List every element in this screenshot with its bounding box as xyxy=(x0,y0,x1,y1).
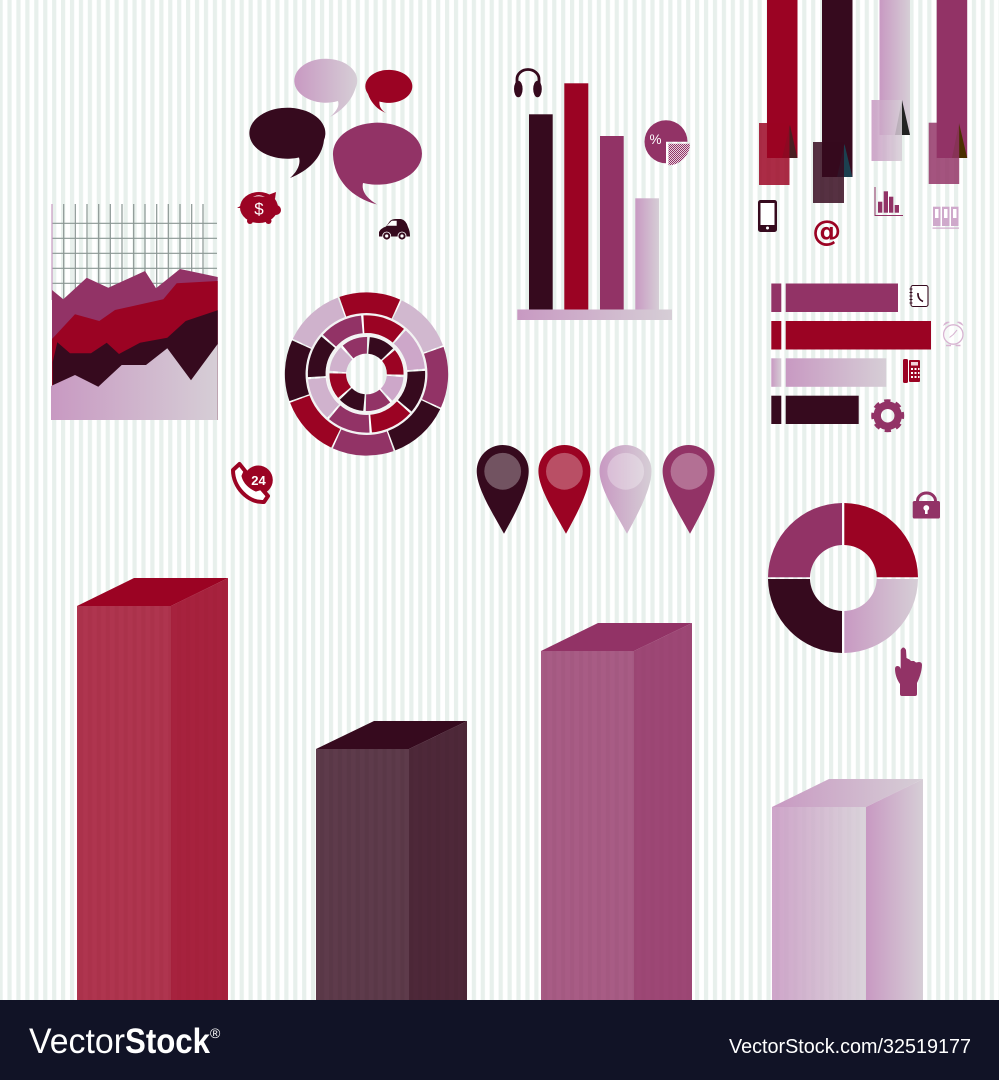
3D column: red xyxy=(77,578,228,1000)
row: light xyxy=(771,358,886,387)
area: dark xyxy=(53,310,218,420)
area: magenta xyxy=(52,269,218,420)
row: magenta xyxy=(771,284,898,312)
icon: gear xyxy=(871,399,905,433)
inner ring xyxy=(326,334,407,414)
bar: magenta xyxy=(600,136,624,310)
pin: light xyxy=(600,445,652,534)
pin: dark xyxy=(477,445,529,534)
ribbon: light xyxy=(872,0,910,161)
ribbon: magenta xyxy=(929,0,967,184)
bar: red xyxy=(564,83,588,310)
concentric ring chart xyxy=(271,279,462,469)
bubble: red xyxy=(365,70,412,113)
grid xyxy=(52,204,217,300)
pin: magenta xyxy=(663,445,715,534)
pin: red xyxy=(538,445,590,534)
area chart xyxy=(51,204,218,420)
segment: light xyxy=(844,579,918,653)
ribbon: dark xyxy=(813,0,852,203)
row: dark xyxy=(771,396,859,424)
icon: headphones xyxy=(514,70,542,97)
3D column: light xyxy=(772,779,923,1000)
outer ring xyxy=(271,279,462,469)
icon: percent pie: % xyxy=(649,132,662,147)
speech bubbles xyxy=(249,59,422,204)
bubble: magenta xyxy=(333,123,422,204)
3D column: dark xyxy=(316,721,467,1000)
footer band xyxy=(0,1000,999,1080)
icon: 24 hour phone: 24 xyxy=(251,473,266,488)
bar chart xyxy=(517,83,672,320)
icon: car xyxy=(379,219,410,240)
icon: binders xyxy=(932,207,959,229)
area: red xyxy=(52,281,218,420)
icon: percent pie xyxy=(644,120,690,165)
icon: address book xyxy=(910,286,928,306)
row: red xyxy=(771,321,931,350)
icon: piggy bank xyxy=(237,192,281,224)
horizontal bars xyxy=(771,284,931,424)
chart base xyxy=(517,310,672,320)
segment: red xyxy=(844,503,918,577)
bubble: light xyxy=(294,59,357,117)
icon: desk telephone xyxy=(903,359,920,383)
donut chart xyxy=(768,503,918,653)
icon: 24 hour phone xyxy=(233,464,273,502)
footer logo: VectorStock xyxy=(29,1022,220,1061)
area: light xyxy=(51,344,218,420)
footer url: VectorStock.com/32519177 xyxy=(729,1035,971,1058)
icon: padlock xyxy=(913,493,940,518)
icon: piggy bank: $ xyxy=(254,200,264,218)
icon: alarm clock xyxy=(943,322,964,346)
icon: small bar chart xyxy=(875,187,903,216)
ribbon: red xyxy=(759,0,798,185)
icon: at sign: @ xyxy=(812,214,841,248)
bar: light xyxy=(635,198,659,310)
footer logo: ® xyxy=(210,1025,221,1041)
middle ring xyxy=(296,304,437,444)
segment: magenta xyxy=(768,503,842,577)
bubble: dark xyxy=(249,108,325,178)
map pins xyxy=(477,445,715,534)
icon: pointing hand xyxy=(895,648,922,696)
segment: dark xyxy=(768,579,842,653)
icon: smartphone xyxy=(758,200,777,232)
3D column: magenta xyxy=(541,623,692,1000)
bar: dark xyxy=(529,114,553,310)
vertical ribbons xyxy=(759,0,967,203)
